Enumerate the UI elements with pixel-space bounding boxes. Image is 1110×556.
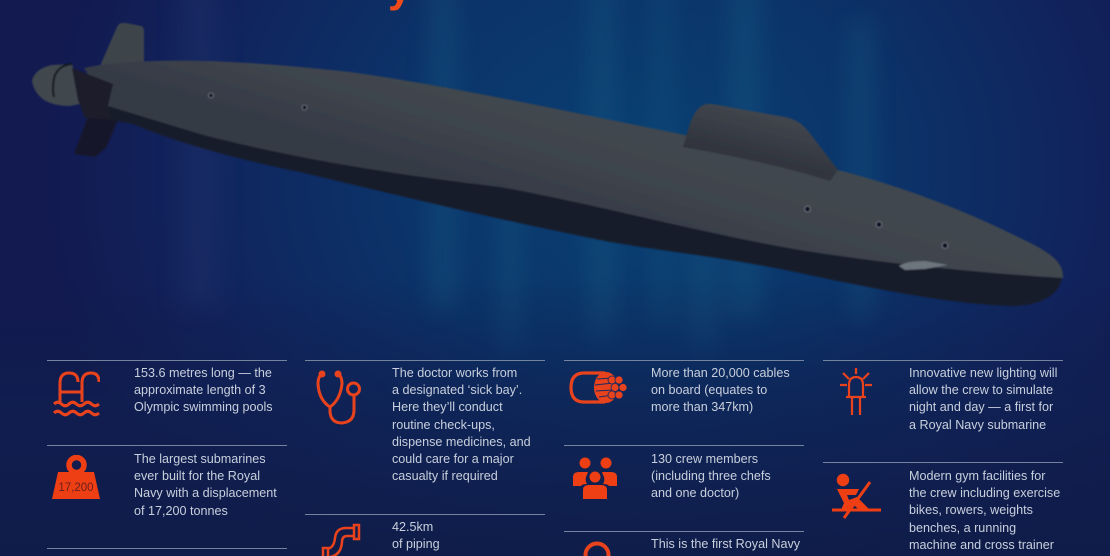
tail cone <box>32 64 84 106</box>
panel: lighting fact <box>823 360 1063 432</box>
text <box>651 452 771 500</box>
lower tail fin <box>74 116 118 157</box>
text: The doctor works from <box>392 366 517 380</box>
submarine <box>32 23 1063 306</box>
panel: crew fact <box>564 445 804 500</box>
text <box>651 366 790 414</box>
text: Navy with a displacement <box>134 486 277 500</box>
text: Here they’ll conduct <box>392 400 503 414</box>
text: This is the first Royal Navy <box>651 537 800 551</box>
hull lit side <box>84 61 1063 278</box>
text: 130 crew members <box>651 452 758 466</box>
text: on board (equates to <box>651 383 767 397</box>
conning tower <box>683 104 838 181</box>
text: bikes, rowers, weights <box>909 503 1033 517</box>
text: of piping <box>392 537 440 551</box>
text: (including three chefs <box>651 469 771 483</box>
panel: piping fact <box>305 514 545 556</box>
icon: stethoscope <box>316 370 361 424</box>
icon: weight: 17,200 <box>58 482 94 494</box>
panel: cables fact <box>564 360 804 414</box>
text: 153.6 metres long — the <box>134 366 272 380</box>
rudder dark band <box>72 68 113 120</box>
panel: displacement fact <box>47 445 287 518</box>
text <box>909 469 1060 552</box>
text: Olympic swimming pools <box>134 400 273 414</box>
icon: cable bundle <box>569 371 627 404</box>
text <box>134 452 277 518</box>
upper tail fin <box>100 23 144 66</box>
text: casualty if required <box>392 469 498 483</box>
text: the crew including exercise <box>909 486 1060 500</box>
icon: LED <box>840 368 872 415</box>
text: approximate length of 3 <box>134 383 266 397</box>
text: ever built for the Royal <box>134 469 260 483</box>
text: dispense medicines, and <box>392 435 531 449</box>
hull shadow side <box>100 100 1062 306</box>
text <box>392 366 531 483</box>
icon: ring <box>584 542 610 556</box>
text <box>134 366 273 414</box>
icon: rower <box>832 474 881 519</box>
text: More than 20,000 cables <box>651 366 790 380</box>
text: benches, a running <box>909 521 1016 535</box>
panel: doctor fact <box>305 360 545 483</box>
text: Innovative new lighting will <box>909 366 1057 380</box>
text: night and day — a first for <box>909 400 1053 414</box>
text: routine check-ups, <box>392 418 495 432</box>
text: Modern gym facilities for <box>909 469 1045 483</box>
text: a designated ‘sick bay’. <box>392 383 522 397</box>
text: of 17,200 tonnes <box>134 504 228 518</box>
nose hydroplane <box>899 261 948 270</box>
text: and one doctor) <box>651 486 739 500</box>
hull ports <box>208 93 948 248</box>
icon: people <box>573 458 617 499</box>
text <box>909 366 1057 432</box>
text: could care for a major <box>392 452 514 466</box>
text: machine and cross trainer <box>909 538 1054 552</box>
text: more than 347km) <box>651 400 753 414</box>
panel: first Royal Navy fact <box>564 531 804 556</box>
panel: length fact <box>47 360 287 416</box>
icon: swimming pool <box>53 372 100 416</box>
text: 42.5km <box>392 520 433 534</box>
icon: weight <box>52 455 100 499</box>
text: The largest submarines <box>134 452 266 466</box>
text <box>392 520 440 551</box>
panel: gym fact <box>823 462 1063 552</box>
text: a Royal Navy submarine <box>909 418 1046 432</box>
text: allow the crew to simulate <box>909 383 1053 397</box>
icon: pipe <box>322 524 360 556</box>
